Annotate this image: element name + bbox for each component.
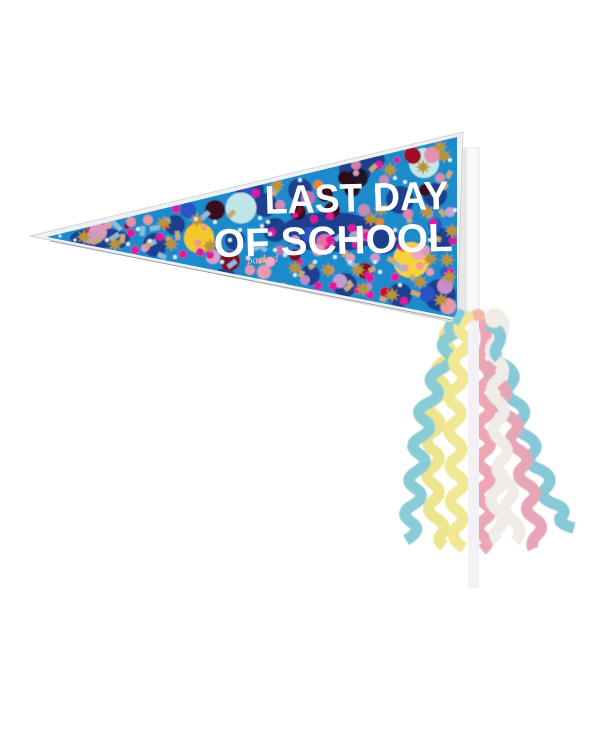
ribbon: white strands: [490, 312, 520, 541]
confetti: gold stars: [76, 139, 460, 308]
sleeve seam band: [457, 149, 467, 312]
title line 1: LAST DAY: [264, 174, 449, 223]
confetti: pale blue large discs: [226, 147, 440, 224]
confetti: dark blue patches: [70, 150, 456, 311]
ribbon: blue top fold: [487, 325, 500, 358]
confetti: magenta dots: [127, 157, 457, 305]
ribbons behind the stick: [405, 312, 574, 550]
confetti: pink and lilac discs: [84, 147, 456, 314]
title line 2: OF SCHOOL: [213, 216, 453, 266]
ribbon: inner pink: [478, 320, 491, 550]
bottom stitch line: [50, 241, 457, 321]
stick: [468, 300, 479, 588]
confetti: maroon and red discs: [86, 147, 431, 297]
title: LAST DAY OF SCHOOL: [212, 174, 453, 266]
ribbon: left blue: [405, 318, 462, 540]
confetti: royal blue discs: [179, 187, 450, 302]
pennant flag illustration: [30, 132, 576, 588]
confetti: pale glitter specks: [58, 158, 457, 302]
ribbon: outer pink: [488, 345, 541, 549]
pennant blue panel with confetti: [40, 130, 460, 325]
pennant frame: [30, 132, 463, 323]
ribbon: front yellow: [449, 316, 472, 548]
small pink script logo: packed: [246, 252, 279, 267]
pennant sleeve: [456, 148, 479, 312]
confetti: paper strips: [92, 165, 451, 315]
ribbon knot at top of tassel: [455, 308, 503, 328]
ribbon: right blue: [487, 325, 574, 528]
ribbon: back yellow: [427, 322, 456, 546]
confetti: yellow discs: [184, 180, 429, 278]
